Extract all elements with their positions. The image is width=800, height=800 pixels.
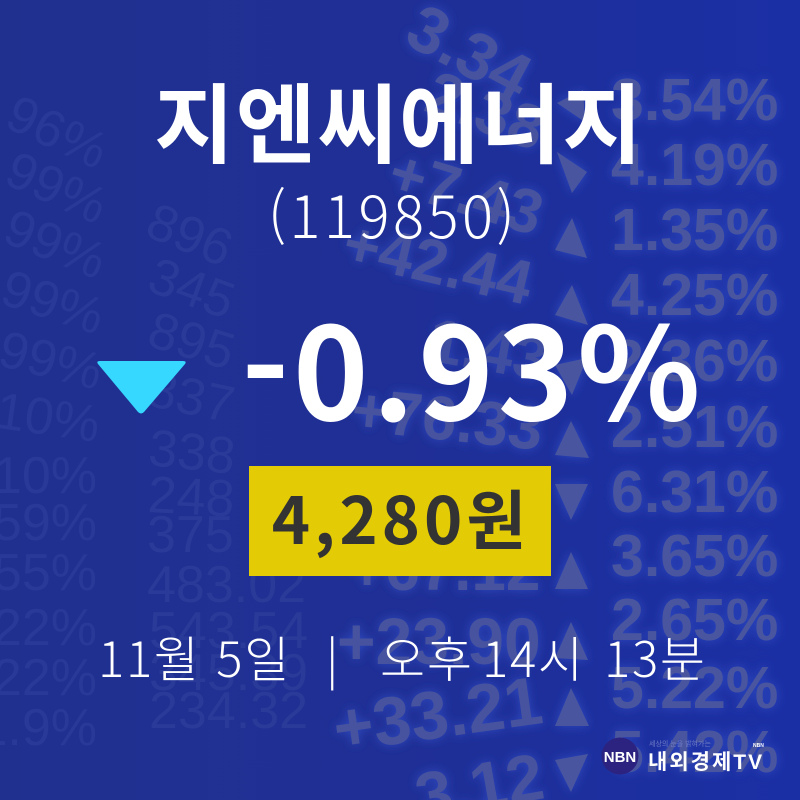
title: company name: 지엔씨에너지 [154,56,644,182]
logo: NBN 내외경제TV [602,738,764,776]
ticker column: right percentages: 3.54% [611,67,778,133]
ticker column: faint centre numbers: 234.32 [149,682,308,740]
date and time: 13분 [604,621,707,692]
ticker column: middle numbers: +67.12 [349,535,540,604]
ticker column: triangles [555,90,589,792]
date and time: 11월 5일 [98,621,291,692]
ticker column: faint centre numbers: 345 [141,247,242,331]
ticker column: middle numbers: +76.33 [349,375,546,464]
stock code: (119850) [268,171,518,255]
date and time: 오후 [380,621,474,692]
ticker column: faint centre numbers: 483.02 [147,556,306,614]
ticker column: right percentages: 3.65% [611,523,778,589]
ticker column: right percentages: 6.31% [611,459,778,525]
ticker column: middle numbers: +7.43 [381,137,551,249]
change percent: -0.93% [241,272,705,457]
ticker column: right percentages: 5.42% [611,719,778,785]
date and time: | [326,621,340,692]
logo small NBN: NBN [753,743,764,749]
ticker column: middle numbers: +23.90 [337,604,541,678]
ticker column: faint left percentages [0,84,116,757]
ticker column: right percentages: 2.36% [611,328,778,394]
ticker column: faint centre numbers: 896 [139,192,241,279]
ticker column: faint centre numbers: 895 [141,301,241,382]
ticker column: right percentages [611,67,778,785]
ticker column: faint centre numbers: 375 [147,506,234,564]
ticker column: faint left percentages: 96% [0,84,116,181]
ticker column: right percentages: 1.35% [611,197,778,263]
logo circle [602,738,638,774]
ticker column: right percentages: 4.25% [611,262,778,328]
ticker column: faint centre numbers: 837 [143,360,239,435]
ticker column: middle numbers: 1.43 [423,306,553,395]
logo tagline: 세상의 눈을 밝혀가는 [649,739,711,749]
price box [249,466,551,576]
ticker column: middle numbers: +33.21 [329,662,547,767]
icon: down arrow [97,361,186,414]
ticker column: faint centre numbers: 345.39 [149,644,308,702]
ticker column: faint centre numbers: 338 [146,419,238,486]
ticker column: middle numbers: 2.38 [417,58,554,164]
ticker column: faint centre numbers: 248 [146,466,236,529]
ticker column: right percentages: 2.65% [611,587,778,653]
ticker column: middle numbers: +42.44 [337,208,539,319]
logo wordmark: 내외경제TV [648,746,764,776]
logo circle: NBN [604,749,636,766]
price value: 4,280원 [272,469,530,563]
ticker column: faint centre numbers: 543.54 [149,602,308,660]
ticker column: faint left percentages: 99% [0,141,116,236]
ticker column: middle numbers [329,0,554,800]
ticker column: right percentages: 2.51% [611,394,778,460]
date and time: 14시 [482,621,585,692]
ticker column: right percentages: 5.22% [611,655,778,721]
ticker column: right percentages: 4.19% [611,132,778,198]
ticker column: faint centre numbers [139,192,308,740]
